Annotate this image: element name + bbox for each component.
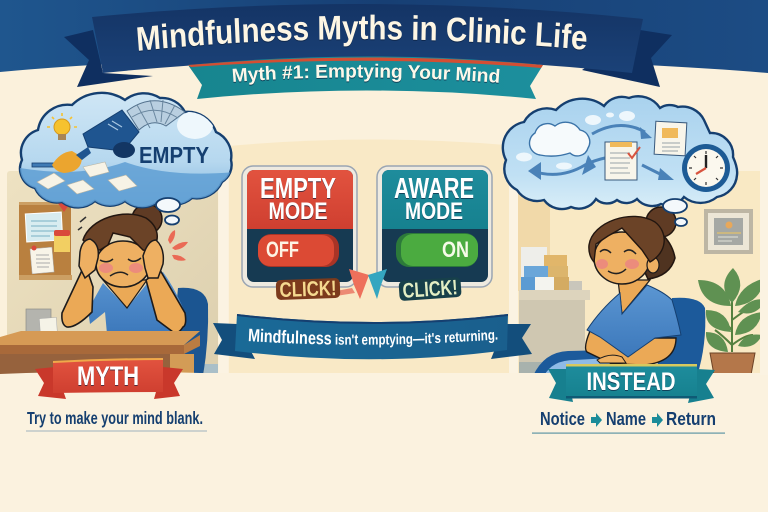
instead steps: Name <box>606 409 646 429</box>
arrow <box>591 413 602 427</box>
instead steps: Notice <box>540 409 585 429</box>
title text: Mindfulness Myths in Clinic Life <box>137 14 586 52</box>
click label right: CLICK! <box>402 276 458 303</box>
books on shelf <box>521 247 582 290</box>
hair back <box>634 207 676 279</box>
icon: light bulb <box>47 113 77 140</box>
water area <box>20 111 235 210</box>
subtitle text: Myth #1: Emptying Your Mind <box>232 64 500 86</box>
face <box>594 232 650 284</box>
off switch: OFF <box>266 237 299 262</box>
thought cloud: empty <box>20 93 235 224</box>
toggle card: empty mode <box>242 166 357 287</box>
instead ribbon: INSTEAD <box>586 368 676 396</box>
stress marks <box>78 217 188 261</box>
icon: checklist <box>605 142 640 180</box>
scattered papers <box>37 162 137 194</box>
panel: calm clinic room <box>518 171 766 376</box>
title ribbon <box>64 4 672 99</box>
toggle card: aware mode: MODE <box>405 198 463 225</box>
click label left: CLICK! <box>279 277 337 302</box>
hands <box>79 239 163 278</box>
header band <box>0 0 768 73</box>
legs <box>533 350 620 376</box>
shirt <box>88 272 186 334</box>
myth ribbon: MYTH <box>77 361 139 391</box>
takeaway banner <box>213 314 532 360</box>
banner text: Mindfulness isn't emptying—it's returning. <box>248 328 498 348</box>
arrows <box>532 125 664 176</box>
instead steps: Return <box>666 409 716 429</box>
shirt <box>587 285 681 357</box>
bulletin board <box>19 202 72 280</box>
label: EMPTY <box>260 173 336 205</box>
instead ribbon <box>548 364 715 403</box>
arrow <box>652 413 663 427</box>
label: EMPTY: EMPTY <box>139 142 209 168</box>
arms <box>586 331 676 365</box>
click arrows <box>336 269 387 299</box>
icon: document <box>654 121 687 156</box>
instead steps <box>532 409 725 434</box>
icon: orange funnel <box>32 147 91 173</box>
panel: stressed clinic room <box>0 171 218 376</box>
toggle card: aware mode <box>377 166 492 287</box>
icon: blue roll <box>83 110 139 158</box>
chair <box>170 288 208 376</box>
chair <box>655 298 705 376</box>
subtitle ribbon <box>188 56 543 99</box>
small clouds <box>516 111 635 170</box>
icon: white cloud <box>529 122 590 156</box>
hair front <box>589 216 664 262</box>
desk papers <box>26 309 58 339</box>
neck <box>103 280 147 308</box>
toggle card: empty mode: MODE <box>268 198 328 225</box>
myth description: Try to make your mind blank. <box>27 408 203 428</box>
neck <box>618 280 650 314</box>
hands <box>597 355 626 363</box>
panel: centre wall <box>229 140 518 376</box>
arms <box>62 264 186 333</box>
hair and bun <box>83 204 162 252</box>
plant <box>698 268 766 375</box>
icon: clock <box>682 144 730 192</box>
desk <box>0 331 200 376</box>
lower cream section <box>0 372 768 512</box>
label: AWARE <box>394 173 474 205</box>
framed certificate <box>704 209 753 254</box>
icon: fan grid <box>127 100 185 130</box>
shelf <box>519 290 590 376</box>
myth ribbon <box>35 358 183 399</box>
thought cloud: aware <box>503 96 737 226</box>
face <box>96 241 150 287</box>
on switch: ON <box>442 237 469 262</box>
